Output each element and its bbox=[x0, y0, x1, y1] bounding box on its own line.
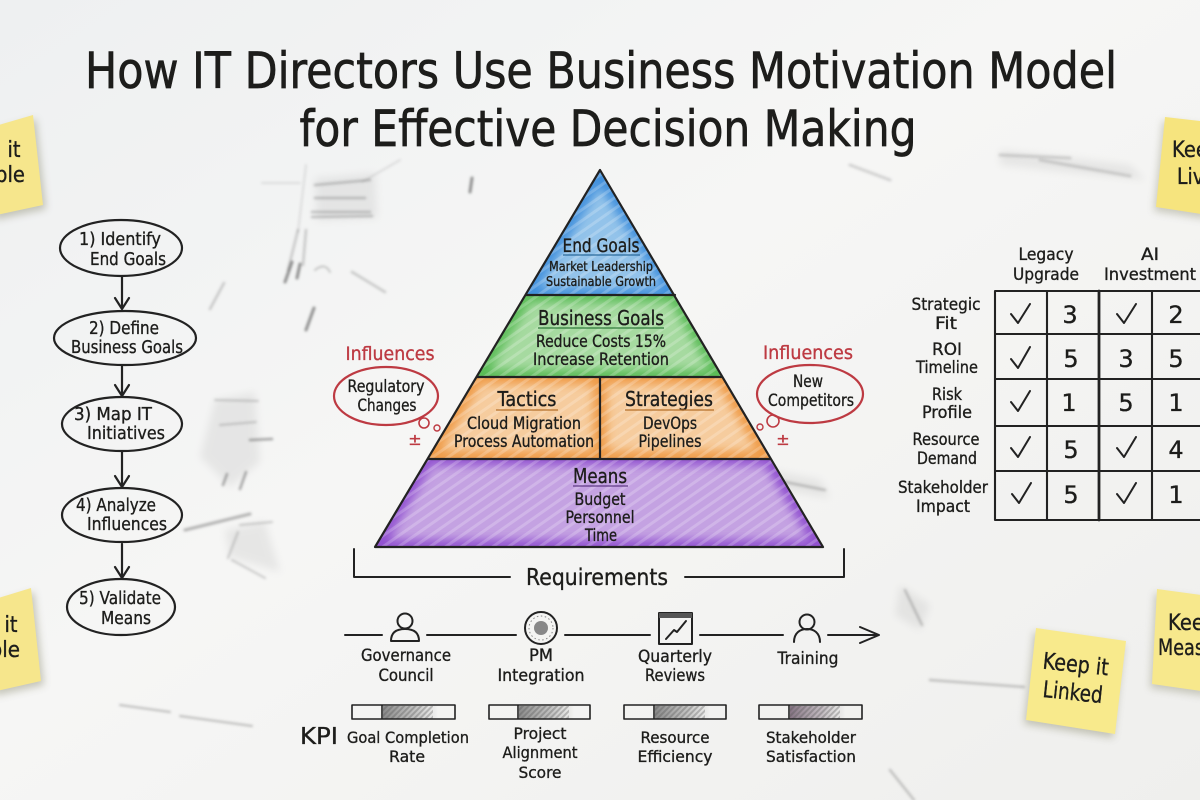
row labels bbox=[898, 295, 988, 517]
tier: end goals: Sustainable Growth bbox=[546, 275, 656, 290]
label: training: Training bbox=[777, 649, 838, 669]
sticky note: Keep it Linked: Keep it bbox=[1042, 649, 1110, 681]
tier: end goals: Market Leadership bbox=[549, 260, 653, 275]
sticky note: Keep it Linked bbox=[1024, 628, 1126, 738]
arrow 4 to 5 bbox=[115, 544, 129, 578]
tier: business goals bbox=[477, 295, 722, 377]
label: quarterly reviews bbox=[638, 647, 712, 686]
KPI label: KPI bbox=[300, 724, 338, 750]
tier: strategies bbox=[600, 377, 769, 458]
KPI: resource efficiency bbox=[624, 705, 726, 766]
tier: means: Personnel bbox=[566, 508, 634, 528]
step 4: 4) Analyze bbox=[76, 495, 156, 516]
KPI: goal completion rate: Rate bbox=[389, 747, 425, 766]
step 5: Means bbox=[101, 608, 151, 629]
label: PM integration: PM bbox=[529, 646, 553, 666]
step 2: Business Goals bbox=[71, 337, 183, 358]
step 3: Initiatives bbox=[87, 423, 165, 444]
row labels: Impact bbox=[916, 497, 970, 517]
KPI: project alignment score: Project bbox=[514, 724, 566, 743]
matrix values: 3 bbox=[1118, 345, 1134, 373]
tier: end goals: End Goals bbox=[562, 235, 640, 257]
KPI: project alignment score bbox=[489, 705, 590, 782]
matrix values: 2 bbox=[1168, 301, 1184, 329]
row labels: ROI bbox=[932, 340, 962, 360]
influence: regulatory changes: Regulatory bbox=[348, 377, 424, 397]
influence: new competitors bbox=[757, 342, 863, 449]
tier: means: Budget bbox=[574, 490, 626, 510]
step 1: End Goals bbox=[90, 249, 166, 270]
KPI: resource efficiency: Resource bbox=[640, 728, 710, 747]
row labels: Stakeholder bbox=[898, 478, 988, 498]
matrix values: 1 bbox=[1168, 389, 1184, 417]
label: governance council: Council bbox=[378, 666, 434, 686]
row labels: Resource bbox=[912, 430, 980, 450]
influence: new competitors: Competitors bbox=[768, 391, 854, 411]
sticky note: top right bbox=[1154, 117, 1200, 219]
label: governance council bbox=[361, 646, 451, 686]
row labels: Timeline bbox=[915, 358, 978, 378]
arrow 3 to 4 bbox=[115, 452, 129, 487]
tier: strategies: DevOps bbox=[643, 414, 697, 434]
check marks bbox=[1011, 304, 1136, 503]
table grid bbox=[995, 291, 1200, 520]
matrix values: 5 bbox=[1063, 345, 1079, 373]
tier: business goals: Increase Retention bbox=[533, 350, 669, 370]
sticky note: bottom left: it bbox=[4, 613, 18, 638]
step 1: 1) Identify bbox=[79, 229, 161, 250]
matrix values bbox=[1061, 301, 1184, 509]
sticky note: top left: it bbox=[8, 138, 21, 163]
step 4 bbox=[62, 488, 182, 542]
tier: tactics: Process Automation bbox=[454, 432, 594, 452]
sticky note: Keep it Linked: Linked bbox=[1042, 677, 1104, 709]
tier: tactics bbox=[428, 377, 600, 458]
step 2 bbox=[54, 311, 196, 365]
requirements bracket: Requirements bbox=[526, 565, 668, 591]
arrow 2 to 3 bbox=[115, 366, 129, 396]
label: PM integration bbox=[498, 646, 584, 686]
KPI row bbox=[300, 705, 862, 782]
row labels: Risk bbox=[932, 385, 962, 405]
column headers: AI bbox=[1141, 245, 1159, 265]
label: PM integration: Integration bbox=[498, 666, 584, 686]
KPI: goal completion rate: Goal Completion bbox=[347, 728, 469, 747]
tier: tactics: Cloud Migration bbox=[467, 414, 581, 434]
KPI: stakeholder satisfaction bbox=[759, 705, 862, 766]
icon: quarterly review chart bbox=[659, 613, 692, 644]
step 1 bbox=[60, 220, 182, 276]
tier: business goals: Business Goals bbox=[538, 306, 664, 330]
column headers bbox=[1013, 245, 1196, 285]
influence: regulatory changes: Influences bbox=[346, 343, 434, 365]
decision matrix bbox=[898, 245, 1200, 520]
requirements bracket bbox=[354, 549, 844, 591]
step 3 bbox=[62, 397, 182, 451]
sticky note: bottom left bbox=[0, 588, 44, 696]
influence: new competitors: Influences bbox=[763, 342, 853, 364]
title: for Effective Decision Making bbox=[300, 100, 916, 158]
KPI: stakeholder satisfaction: Satisfaction bbox=[766, 747, 856, 766]
KPI: project alignment score: Alignment bbox=[502, 743, 578, 762]
row labels: Demand bbox=[917, 449, 977, 469]
tier: end goals bbox=[526, 172, 675, 295]
KPI: project alignment score: Score bbox=[518, 763, 562, 782]
influence: new competitors: New bbox=[793, 372, 823, 392]
row labels: Strategic bbox=[912, 295, 980, 315]
influence: regulatory changes: Changes bbox=[358, 396, 417, 416]
step 4: Influences bbox=[87, 514, 167, 535]
column headers: Legacy bbox=[1018, 245, 1074, 265]
column headers: Upgrade bbox=[1013, 265, 1079, 285]
pyramid outline bbox=[375, 170, 823, 547]
timeline line and arrow bbox=[345, 627, 879, 643]
icon: training person bbox=[794, 614, 820, 642]
matrix values: 5 bbox=[1063, 481, 1079, 509]
label: governance council: Governance bbox=[361, 646, 451, 666]
arrow 1 to 2 bbox=[115, 277, 129, 309]
step 2: 2) Define bbox=[89, 318, 159, 339]
influence: regulatory changes bbox=[334, 343, 440, 449]
tier: tactics: Tactics bbox=[497, 387, 556, 411]
KPI: goal completion rate bbox=[347, 705, 469, 766]
matrix values: 5 bbox=[1118, 389, 1134, 417]
tier: strategies: Strategies bbox=[625, 387, 713, 411]
KPI: resource efficiency: Efficiency bbox=[638, 747, 712, 766]
influence: regulatory changes: ± bbox=[408, 430, 422, 449]
icon: PM integration circle bbox=[525, 612, 557, 644]
icon: governance person bbox=[391, 614, 419, 641]
matrix values: 5 bbox=[1063, 436, 1079, 464]
KPI: stakeholder satisfaction: Stakeholder bbox=[766, 728, 856, 747]
matrix values: 3 bbox=[1062, 301, 1078, 329]
title bbox=[85, 42, 1117, 158]
label: quarterly reviews: Quarterly bbox=[638, 647, 712, 667]
row labels: Profile bbox=[922, 403, 972, 423]
process flow bbox=[54, 220, 196, 635]
matrix values: 1 bbox=[1168, 481, 1184, 509]
matrix values: 1 bbox=[1061, 389, 1077, 417]
sticky note: bottom right bbox=[1150, 589, 1200, 696]
tier: means: Means bbox=[573, 464, 627, 488]
tier: means: Time bbox=[584, 526, 617, 546]
tier: strategies: Pipelines bbox=[638, 432, 702, 452]
pyramid bbox=[375, 170, 823, 547]
column headers: Investment bbox=[1104, 265, 1196, 285]
requirements timeline bbox=[345, 612, 879, 686]
influence: new competitors: ± bbox=[776, 430, 790, 449]
tier: business goals: Reduce Costs 15% bbox=[536, 332, 666, 352]
step 3: 3) Map IT bbox=[74, 404, 153, 425]
step 5 bbox=[67, 579, 175, 635]
matrix values: 5 bbox=[1168, 345, 1184, 373]
matrix values: 4 bbox=[1168, 436, 1184, 464]
row labels: Fit bbox=[935, 314, 957, 334]
sticky note: top left bbox=[0, 115, 46, 220]
tier: means bbox=[376, 458, 822, 547]
step 5: 5) Validate bbox=[79, 588, 161, 609]
label: quarterly reviews: Reviews bbox=[645, 666, 705, 686]
